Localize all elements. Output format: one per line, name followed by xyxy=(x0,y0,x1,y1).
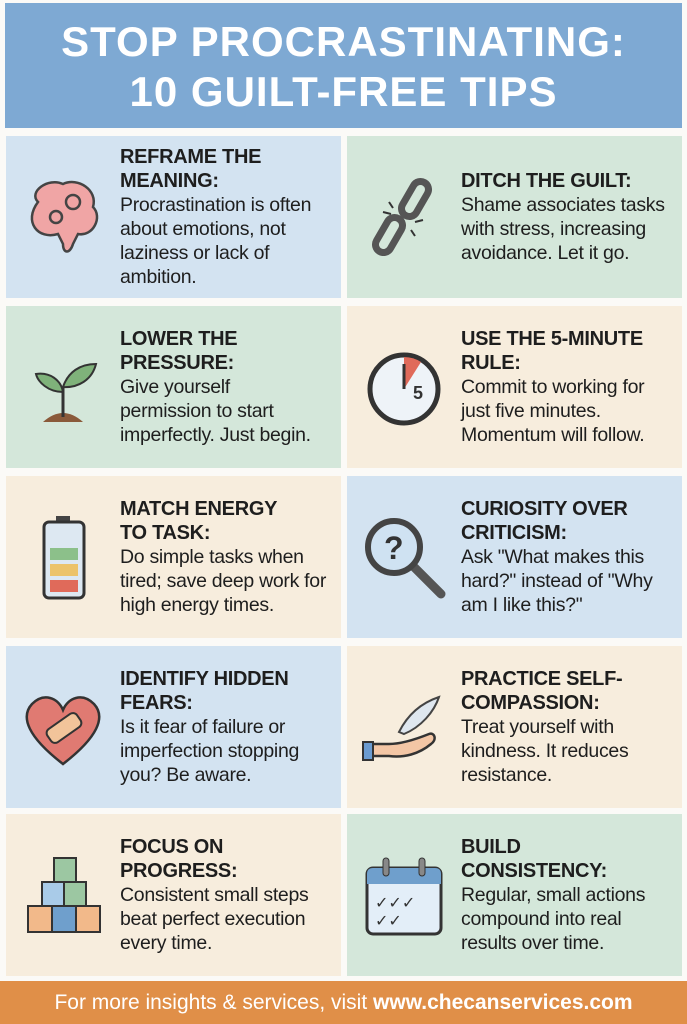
icon: calendar: ✓✓ xyxy=(375,911,402,930)
text: match energy: MATCH ENERGY xyxy=(120,498,277,520)
text: compassion: COMPASSION: xyxy=(461,692,600,714)
text: reframe: MEANING: xyxy=(120,170,219,192)
text: consistency xyxy=(461,836,645,954)
panel: curiosity xyxy=(347,476,682,638)
footer xyxy=(0,981,687,1024)
text: lower: PRESSURE: xyxy=(120,352,234,374)
panel: lower the pressure xyxy=(6,306,341,468)
text: 5-minute: Commit to working for xyxy=(461,376,644,398)
text: 5-minute: USE THE 5-MINUTE xyxy=(461,328,643,350)
icon: blocks xyxy=(27,857,101,933)
text: compassion: PRACTICE SELF- xyxy=(461,668,622,690)
text: fears: Is it fear of failure or imperfection stopping you? Be aware. xyxy=(120,716,299,786)
text: curiosity: CURIOSITY OVER xyxy=(461,498,628,520)
icon: sprout xyxy=(34,363,98,422)
text: reframe: REFRAME THE xyxy=(120,146,261,168)
text: compassion xyxy=(461,668,628,786)
icon: broken chain xyxy=(372,178,432,256)
icon: clock: 5 xyxy=(413,383,423,403)
icon: calendar xyxy=(366,858,442,936)
text: consistency: Regular, small actions compound into real results over time. xyxy=(461,884,645,954)
text: consistency: BUILD xyxy=(461,836,521,858)
panel: match energy xyxy=(6,476,341,638)
text: match energy: Do simple tasks when tired; save deep work for high energy times. xyxy=(120,546,326,616)
text: curiosity: CRITICISM: xyxy=(461,522,567,544)
icon: clock xyxy=(368,352,440,426)
text: progress: Consistent small steps beat perfect execution every time. xyxy=(120,884,308,954)
text: fears: FEARS: xyxy=(120,692,193,714)
text: ditch: DITCH THE GUILT: xyxy=(461,170,631,192)
text: lower: permission to start imperfectly. Just begin. xyxy=(120,400,311,446)
text: reframe xyxy=(120,146,311,288)
panel: build consistency xyxy=(347,814,682,976)
text: fears xyxy=(120,668,299,786)
text: curiosity xyxy=(461,498,653,616)
footer: For more insights & services, visit www.checanservices.com xyxy=(54,991,633,1014)
text: 5-minute: just five minutes. xyxy=(461,400,601,422)
text: fears: IDENTIFY HIDDEN xyxy=(120,668,288,690)
text: 5-minute xyxy=(460,328,644,446)
icon: battery xyxy=(42,516,86,600)
icon: magnifier: ? xyxy=(384,530,404,566)
icon: magnifier xyxy=(365,518,446,598)
text: compassion: Treat yourself with kindness. It reduces resistance. xyxy=(461,716,628,786)
icon: hand with feather xyxy=(362,695,440,761)
title xyxy=(5,3,682,128)
text: lower: Give yourself xyxy=(120,376,230,398)
panel: focus on progress xyxy=(6,814,341,976)
icon: heart bandage xyxy=(26,696,100,766)
text: curiosity: hard?" instead of "Why xyxy=(461,570,653,592)
panel: reframe the meaning xyxy=(6,136,341,298)
text: consistency: CONSISTENCY: xyxy=(461,860,607,882)
text: progress: FOCUS ON xyxy=(120,836,223,858)
text: progress: PROGRESS: xyxy=(120,860,237,882)
icon: calendar: ✓✓✓ xyxy=(375,893,415,912)
text: match energy xyxy=(120,498,326,616)
text: progress xyxy=(120,836,308,954)
panel: self-compassion xyxy=(347,646,682,808)
text: match energy: TO TASK: xyxy=(120,522,210,544)
text: lower: LOWER THE xyxy=(120,328,237,350)
title: 10 GUILT-FREE TIPS xyxy=(130,68,557,115)
text: curiosity: Ask "What makes this xyxy=(461,546,644,568)
text: 5-minute: Momentum will follow. xyxy=(461,424,644,446)
text: curiosity: am I like this?" xyxy=(461,594,582,616)
panel: ditch the guilt xyxy=(347,136,682,298)
panel: 5-minute rule xyxy=(347,306,682,468)
text: reframe: Procrastination is often about emotions, not laziness or lack of ambition. xyxy=(120,194,311,288)
icon: brain xyxy=(30,180,98,253)
text: 5-minute: RULE: xyxy=(461,352,521,374)
title: STOP PROCRASTINATING: xyxy=(61,18,626,65)
text: lower xyxy=(120,328,311,446)
text: ditch: Shame associates tasks with stress, increasing avoidance. Let it go. xyxy=(461,194,665,264)
panel: hidden fears xyxy=(6,646,341,808)
